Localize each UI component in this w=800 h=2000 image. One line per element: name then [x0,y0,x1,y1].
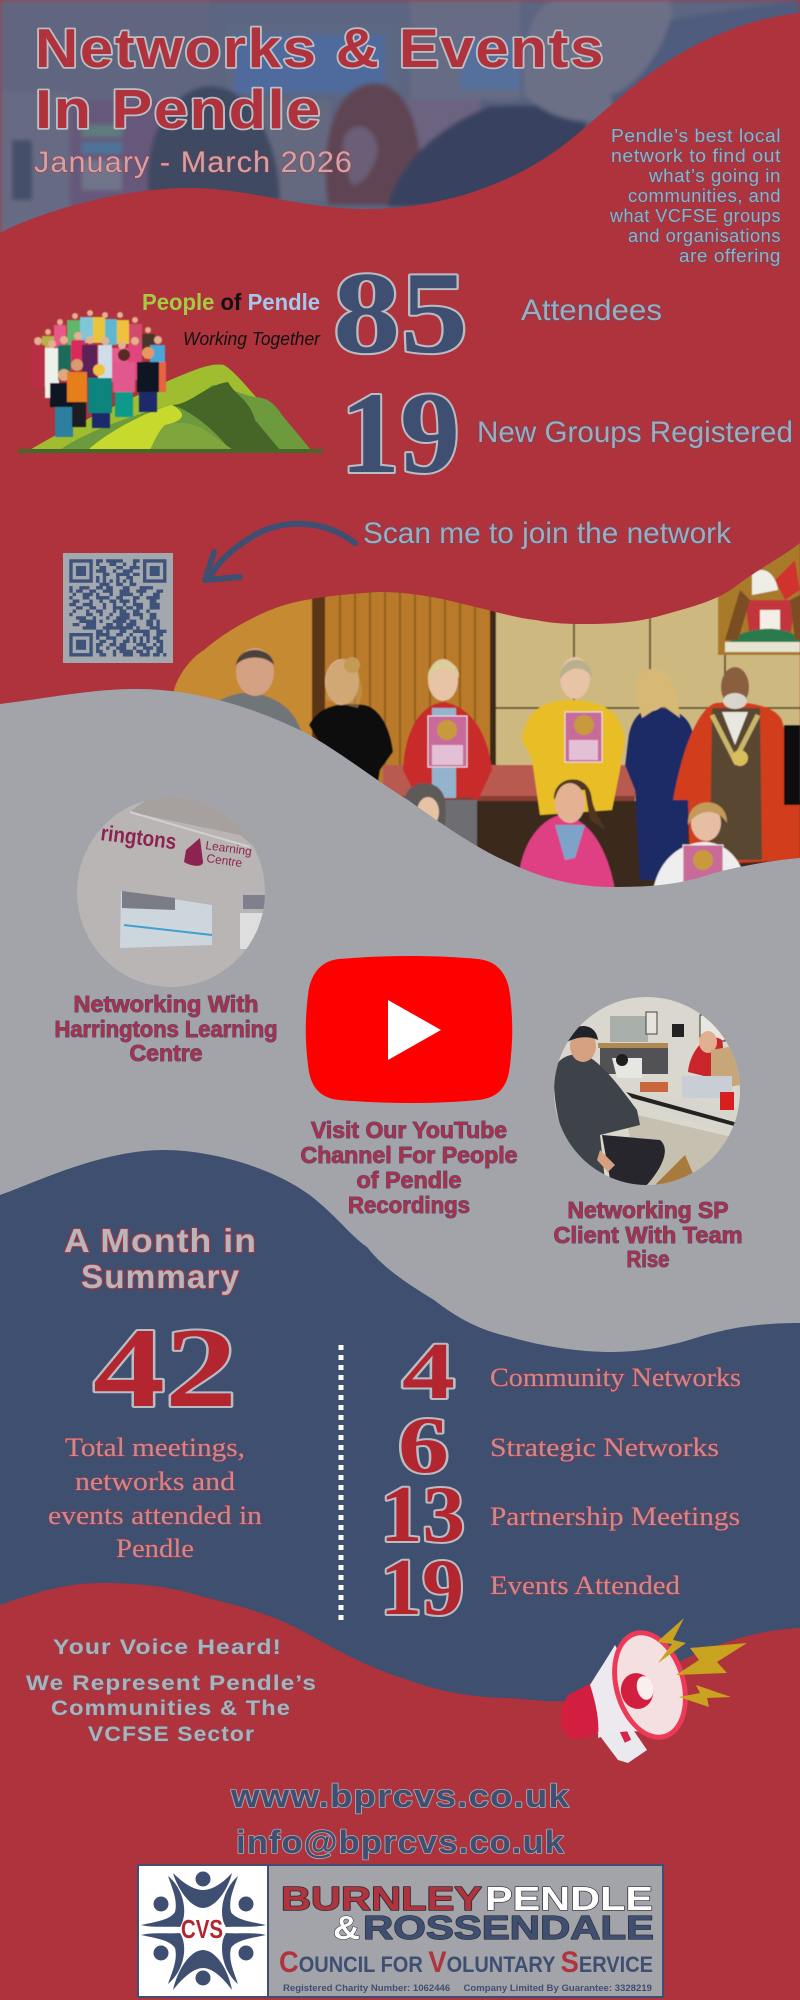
CVS logo panel [138,1865,663,1997]
stat row: strategic networks: Strategic Networks [490,1433,719,1462]
photo: Harringtons Learning Centre: ringtons [99,820,178,854]
organisation name: BURNLEY [281,1880,482,1917]
bottom red section [0,1583,800,2000]
person: white top woman [653,841,742,886]
stat row: events attended: 19 [380,1542,464,1632]
stat row: community networks: 4 [402,1328,455,1416]
arrow to QR code [205,524,355,580]
voice heading: Your Voice Heard! [53,1636,282,1659]
wood wall [173,592,491,784]
organisation name: & [333,1909,360,1946]
title [35,17,605,140]
logo tagline: Working Together [183,329,321,349]
total description: networks and [75,1467,235,1496]
caption: Harringtons [54,991,278,1066]
intro text: what VCFSE groups [609,206,781,226]
icon: megaphone [561,1618,747,1763]
intro text [609,126,781,266]
person: navy dress woman [625,708,694,880]
padded wall panels [495,596,800,802]
title: Networks & Events [35,17,605,79]
heading: A Month in Summary: A Month in [64,1222,257,1259]
total description: Total meetings, [65,1433,245,1462]
person: black top woman [308,704,394,781]
stat: 19 new groups: 19 [340,369,460,498]
person: yellow top woman [522,700,625,815]
email: info@bprcvs.co.uk [236,1824,565,1860]
icon: crowd of people [31,310,166,437]
stat row: community networks [402,1328,741,1416]
stat row: community networks: Community Networks [490,1363,741,1392]
icon: lightning bolts [657,1618,747,1707]
voice text: VCFSE Sector [88,1723,255,1746]
website: www.bprcvs.co.uk [230,1778,570,1814]
stat row: partnership meetings: 13 [380,1471,465,1559]
stat row: partnership meetings: Partnership Meetings [490,1502,740,1531]
caption: YouTube: Visit Our YouTube [311,1117,507,1143]
caption: Team Rise [554,1197,742,1272]
caption: Team Rise: Networking SP [568,1197,728,1223]
icon: mountain [18,364,323,453]
caption: Harringtons: Centre [130,1040,202,1066]
logo wordmark: People of Pendle [142,289,320,315]
intro text: Pendle’s best local [611,126,781,146]
person: seated grey hair woman [404,782,446,826]
person: grey top man [219,692,302,731]
navy section [0,1150,800,1800]
heading: A Month in Summary: Summary [81,1258,240,1295]
icon: CVS figures [141,1872,266,1990]
photo: Team Rise [550,995,745,1190]
stat: 19 new groups: New Groups Registered [477,416,793,449]
total description: Pendle [116,1534,194,1563]
person: red jacket woman [444,799,478,846]
stat: 85 attendees [333,249,662,378]
intro text: and organisations [628,226,781,246]
bench [383,765,635,801]
stat: 19 new groups [340,369,793,498]
group photo [165,540,800,901]
grey section [0,689,800,1400]
QR code [63,553,173,663]
heading: A Month in Summary [64,1222,257,1295]
icon: YouTube logo [306,956,512,1103]
stat: 42 total: 42 [93,1304,237,1431]
photo: Harringtons Learning Centre [77,797,265,987]
stat row: strategic networks [398,1400,719,1490]
caption: Team Rise: Rise [626,1246,670,1272]
voice text [26,1672,317,1746]
intro text: network to find out [611,146,781,166]
caption: YouTube [300,1117,518,1218]
caption: YouTube: of Pendle [356,1167,462,1193]
voice text: Communities & The [51,1697,291,1720]
organisation name: ROSSENDALE [363,1909,654,1946]
coat of arms [718,540,800,655]
caption: Harringtons: Networking With [74,991,258,1017]
CVS wordmark: CVS [181,1914,223,1944]
intro text: are offering [679,246,781,266]
stat row: events attended [380,1542,680,1632]
caption: YouTube: Channel For People [300,1142,518,1168]
stat row: events attended: Events Attended [490,1571,680,1600]
scan prompt: Scan me to join the network [363,517,732,550]
organisation name: PENDLE [485,1880,653,1917]
stat: 85 attendees: Attendees [521,294,662,327]
stat row: strategic networks: 6 [398,1400,449,1490]
intro text: communities, and [628,186,781,206]
organisation subtitle: COUNCIL FOR VOLUNTARY SERVICE [279,1946,653,1979]
caption: YouTube: Recordings [348,1192,470,1218]
registration details: Registered Charity Number: 1062446 Company Limited By Guarantee: 3328219 [283,1983,652,1994]
person: pink top woman [518,815,615,890]
People of Pendle logo [18,289,323,453]
photo: Harringtons Learning Centre: Centre [206,851,244,870]
caption: Harringtons: Harringtons Learning [54,1016,278,1042]
caption: Team Rise: Client With Team [554,1222,742,1248]
stat: 85 attendees: 85 [333,249,468,378]
total description [48,1433,262,1563]
voice text: We Represent Pendle’s [26,1672,317,1695]
organisation name [281,1880,654,1946]
stat row: partnership meetings [380,1471,740,1559]
title: In Pendle [35,78,322,140]
date subtitle: January - March 2026 [34,146,353,179]
intro text: what’s going in [648,166,781,186]
photo: Harringtons Learning Centre: Learning [205,838,253,858]
total description: events attended in [48,1501,262,1530]
header photo [0,0,800,240]
person: mayor [673,702,800,865]
